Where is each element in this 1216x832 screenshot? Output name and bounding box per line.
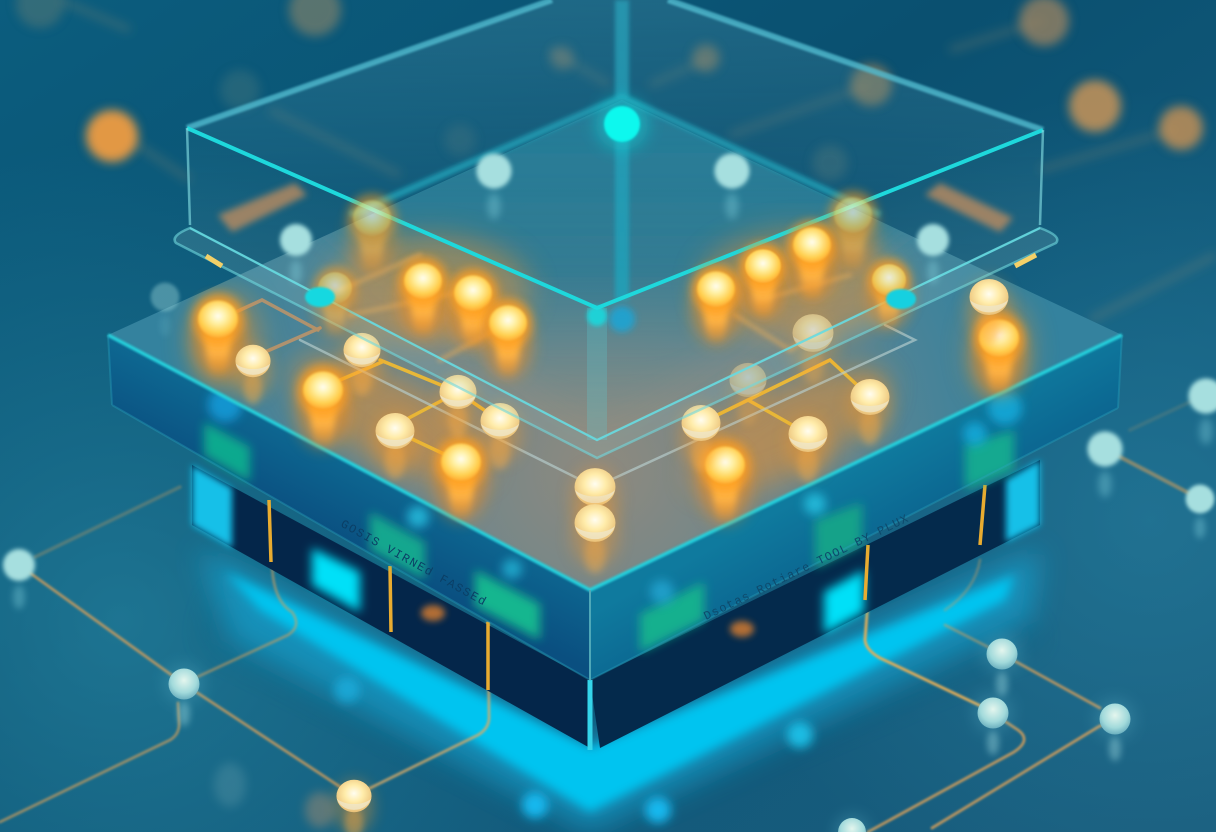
- warm glow clusters: [190, 230, 1030, 519]
- amber pads under glass: [218, 183, 1013, 232]
- circuit traces on slab: [238, 255, 915, 487]
- glass left wall: [187, 128, 597, 440]
- slab engraved text left: GOSIS VIRNEd FASSEd: [338, 517, 489, 610]
- upper glass box: [175, 0, 1057, 458]
- glass edges: [187, 128, 1043, 308]
- glass lid: [187, 0, 1043, 308]
- slab face glow panels: [204, 388, 1022, 652]
- inner glowing square on slab: [350, 0, 880, 300]
- slab edge highlights: [108, 335, 1122, 590]
- darker teal area below the glass: [330, 100, 899, 401]
- slab engraved text right: Dsotas Rotiare TOOL BY PLUX: [702, 512, 912, 624]
- glass lower plate: [175, 228, 1057, 458]
- floor glow under the chip: [200, 550, 1040, 832]
- glass lid back edges: [187, 0, 1043, 130]
- slab top face: [108, 100, 1122, 590]
- slab right front face: [590, 335, 1122, 680]
- circuit nodes on floor: [3, 378, 1216, 832]
- bokeh lights: [16, 0, 1203, 181]
- upper LEDs: [313, 191, 1011, 378]
- slab left front face: [108, 335, 590, 680]
- slab LEDs: [192, 294, 1025, 573]
- glass right wall: [597, 130, 1043, 440]
- circuit traces on floor: [0, 395, 1205, 832]
- lower slab: [108, 60, 1122, 680]
- cyan indicator lights: [151, 98, 949, 337]
- dark base block: [192, 460, 1040, 750]
- faint background traces: [60, 0, 1216, 320]
